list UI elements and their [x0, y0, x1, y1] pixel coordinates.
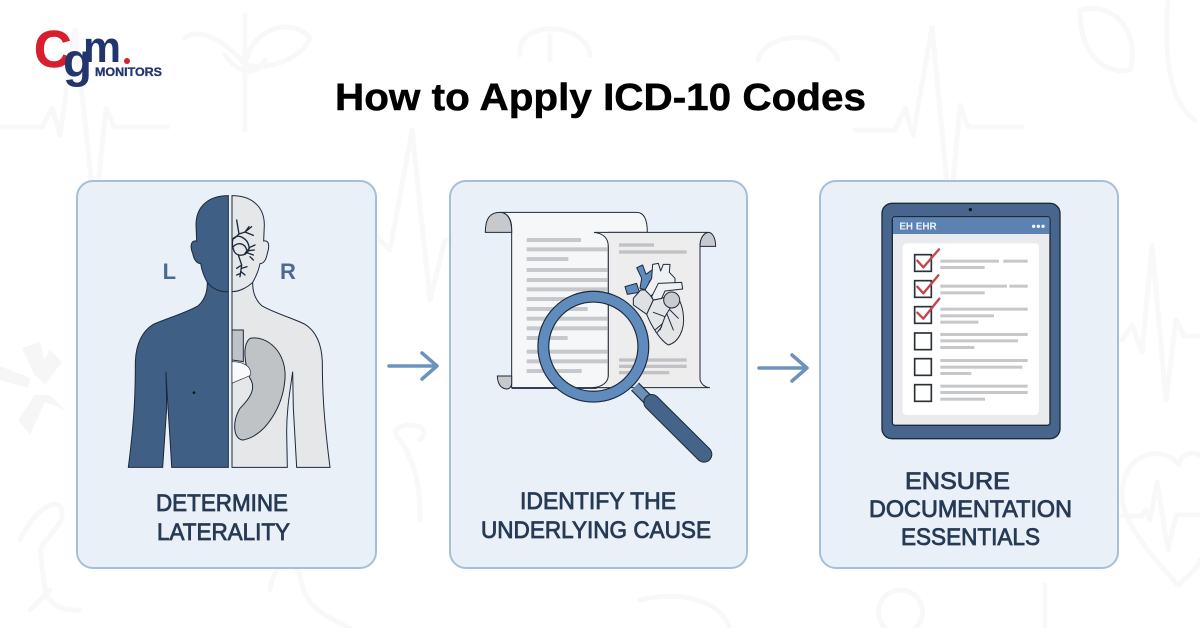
label: ensure documentation essentials: DOCUMENTATION [869, 496, 1072, 523]
panel: determine laterality [77, 181, 376, 568]
icon: organ [235, 338, 285, 440]
label: ensure documentation essentials: ESSENTIALS [901, 524, 1040, 551]
panel: ensure documentation essentials [820, 181, 1118, 568]
label: determine laterality: DETERMINE [156, 490, 288, 517]
label: identify the underlying cause [481, 488, 711, 544]
label: R: R [280, 259, 296, 284]
arrow [389, 353, 437, 379]
label: ensure documentation essentials [869, 468, 1072, 551]
logo: g [63, 35, 92, 88]
icon: magnifier [543, 297, 704, 454]
icon: heart [625, 263, 684, 345]
logo: m [83, 23, 121, 72]
logo [34, 21, 162, 88]
document 1 [485, 212, 647, 389]
header text: EH EHR [899, 221, 937, 232]
panel: identify the underlying cause [450, 181, 747, 568]
label: identify the underlying cause: UNDERLYING CAUSE [481, 517, 711, 544]
logo: C [34, 21, 72, 79]
label: determine laterality [156, 490, 290, 546]
label: identify the underlying cause: IDENTIFY THE [520, 488, 676, 515]
label: ensure documentation essentials: ENSURE [905, 468, 1010, 495]
icon: vessels in head [232, 220, 255, 277]
document 2 [593, 232, 716, 388]
checklist [915, 249, 1028, 401]
logo: MONITORS [95, 67, 162, 79]
icon: documents and magnifier [485, 212, 716, 454]
icon: body split into left and right [128, 196, 330, 467]
title: How to Apply ICD-10 Codes [335, 77, 866, 119]
label: L: L [163, 259, 176, 284]
label: determine laterality: LATERALITY [157, 519, 290, 546]
icon: EHR tablet [882, 203, 1060, 439]
arrow [759, 355, 807, 381]
